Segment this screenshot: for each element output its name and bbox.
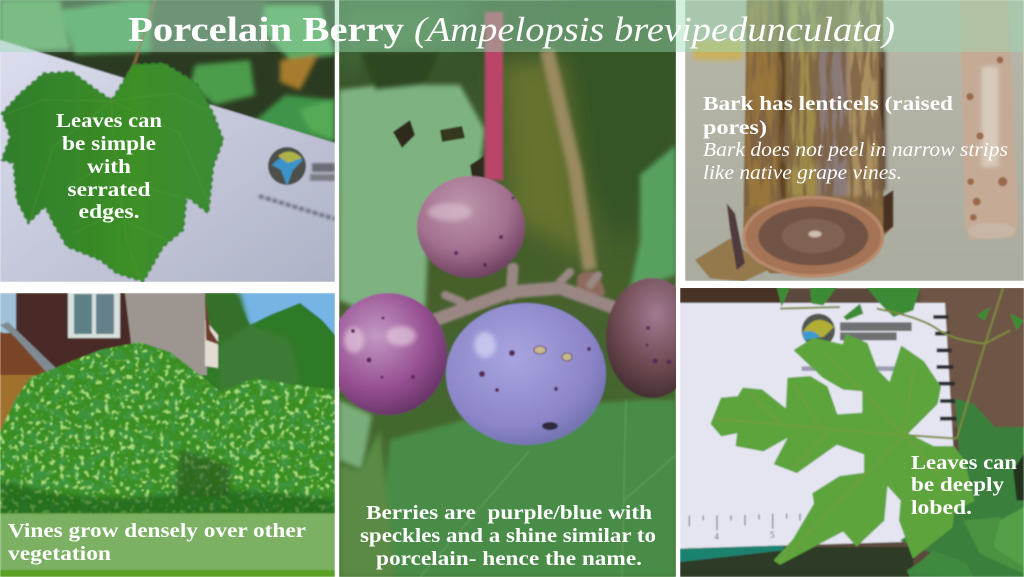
notebook spiral xyxy=(933,317,957,419)
text: simple leaves caption xyxy=(56,110,162,223)
text: lobed leaves caption: Leaves can xyxy=(911,452,1017,474)
text: berries caption xyxy=(360,502,656,570)
title xyxy=(128,10,895,49)
leaf lower xyxy=(340,400,676,577)
text: berries caption: porcelain- hence the name. xyxy=(376,548,642,570)
text: vines caption: vegetation xyxy=(8,543,111,565)
sign logo and web address xyxy=(259,147,335,219)
title: (Ampelopsis brevipedunculata) xyxy=(414,10,895,49)
title: Porcelain Berry xyxy=(128,10,405,49)
text: berries caption: speckles and a shine similar to xyxy=(360,525,656,547)
background leaf left xyxy=(339,52,676,470)
text: simple leaves caption: with xyxy=(87,156,131,178)
large cut vine trunk xyxy=(695,0,893,282)
background foliage right xyxy=(900,399,1024,577)
tendrils and vine stem xyxy=(780,287,1010,439)
icon: deeply lobed leaf xyxy=(712,335,973,564)
text: bark caption: Bark has lenticels (raised xyxy=(703,93,953,115)
text: bark caption: Bark does not peel in narrow strips xyxy=(703,139,1008,161)
text: lobed leaves caption: be deeply xyxy=(911,474,1004,496)
text: vines caption: Vines grow densely over other xyxy=(8,520,306,542)
text: bark caption: pores) xyxy=(703,117,767,139)
icon: serrated heart leaf xyxy=(2,63,223,282)
berry: blue xyxy=(446,303,606,445)
panel: deeply lobed leaf photo: 4 xyxy=(714,531,719,541)
spiral notebook page xyxy=(680,303,958,549)
house window xyxy=(68,293,120,338)
text: lobed leaves caption: lobed. xyxy=(911,497,972,519)
panel: berries photo xyxy=(329,0,698,577)
caption band xyxy=(0,514,335,570)
tan stem xyxy=(547,50,590,270)
text: lobed leaves caption xyxy=(911,452,1017,519)
ruler ticks xyxy=(689,514,800,530)
text: berries caption: Berries are purple/blue with xyxy=(366,502,652,524)
notebook logo and title xyxy=(802,314,912,371)
vine-covered shrub mass xyxy=(0,335,335,520)
text: simple leaves caption: edges. xyxy=(78,201,140,223)
berry: right xyxy=(606,278,676,398)
leaf holes xyxy=(393,120,415,148)
text: bark caption xyxy=(703,93,1008,184)
berry: left xyxy=(329,293,447,415)
text: simple leaves caption: serrated xyxy=(68,179,150,201)
sky xyxy=(235,293,335,335)
text: simple leaves caption: Leaves can xyxy=(56,110,162,132)
pink stem xyxy=(485,12,503,180)
text: simple leaves caption: be simple xyxy=(62,133,156,155)
paper background xyxy=(0,40,335,282)
icon: stem xyxy=(125,0,156,78)
berry highlights and speckles xyxy=(344,196,672,430)
panel: densely growing vines photo xyxy=(0,293,335,577)
house wall xyxy=(6,293,132,368)
small vine stem xyxy=(960,0,1018,239)
berry: top xyxy=(417,176,525,278)
grass xyxy=(0,513,335,577)
title band xyxy=(0,0,1024,52)
top foliage xyxy=(777,287,1024,330)
flower stalk twigs xyxy=(430,268,615,322)
text: bark caption: like native grape vines. xyxy=(703,162,902,184)
panel: serrated simple leaf photo xyxy=(0,0,335,282)
panel: deeply lobed leaf photo xyxy=(680,287,1024,577)
house roof xyxy=(125,293,207,375)
panel: bark photo xyxy=(685,0,1024,282)
panel: deeply lobed leaf photo: 5 xyxy=(770,530,775,540)
text: vines caption xyxy=(8,520,306,565)
